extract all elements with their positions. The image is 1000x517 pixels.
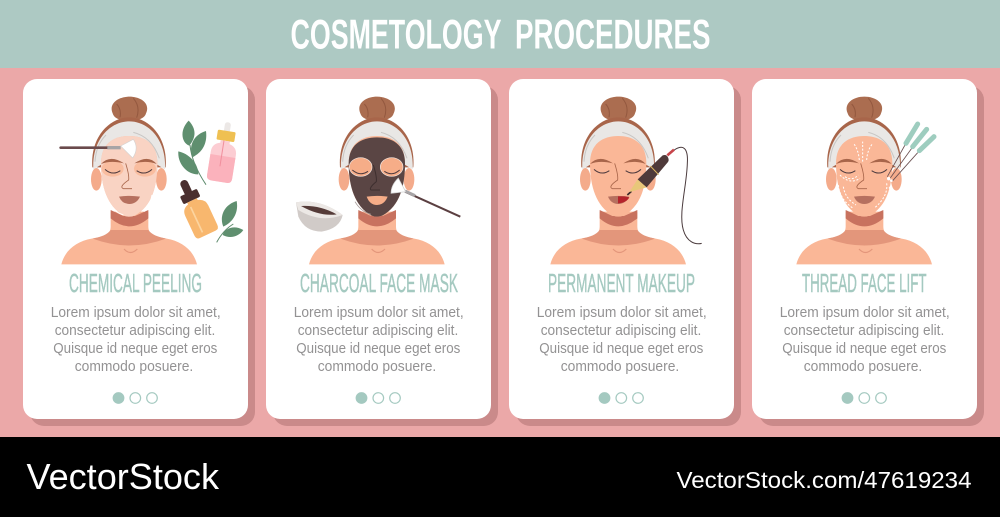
pagination dots bbox=[842, 393, 886, 403]
text block: permanent makeup: Lorem ipsum dolor sit amet, bbox=[537, 305, 707, 321]
heading: charcoal face mask: CHARCOAL FACE MASK bbox=[300, 270, 458, 298]
text block: charcoal face mask: Quisque id neque eget eros bbox=[296, 341, 460, 357]
text block: charcoal face mask: Lorem ipsum dolor sit amet, bbox=[294, 305, 464, 321]
header band bbox=[0, 0, 1000, 68]
pagination dots bbox=[356, 393, 400, 403]
text block: permanent makeup: consectetur adipiscing elit. bbox=[541, 323, 701, 339]
text block: charcoal face mask: commodo posuere. bbox=[318, 359, 436, 375]
text block: thread face lift: Lorem ipsum dolor sit amet, bbox=[780, 305, 950, 321]
text block: permanent makeup: Quisque id neque eget eros bbox=[539, 341, 703, 357]
heading: chemical peeling: CHEMICAL PEELING bbox=[69, 270, 202, 298]
panel: chemical peeling bbox=[23, 79, 255, 426]
illustration: chemical peeling bbox=[61, 97, 243, 264]
text block: chemical peeling bbox=[51, 305, 221, 375]
footer logo: VectorStock bbox=[26, 456, 220, 497]
text block: permanent makeup bbox=[537, 305, 707, 375]
text block: charcoal face mask: consectetur adipiscing elit. bbox=[298, 323, 458, 339]
title: COSMETOLOGY bbox=[290, 10, 502, 58]
text block: chemical peeling: Lorem ipsum dolor sit amet, bbox=[51, 305, 221, 321]
text block: permanent makeup: commodo posuere. bbox=[561, 359, 679, 375]
footer image id: VectorStock.com/47619234 bbox=[676, 467, 972, 493]
pagination dots bbox=[113, 393, 157, 403]
illustration: thread face lift bbox=[796, 97, 934, 264]
text block: chemical peeling: commodo posuere. bbox=[75, 359, 193, 375]
text block: thread face lift: Quisque id neque eget eros bbox=[782, 341, 946, 357]
text block: thread face lift: commodo posuere. bbox=[804, 359, 922, 375]
title: PROCEDURES bbox=[515, 10, 710, 58]
illustration: permanent makeup bbox=[550, 97, 702, 264]
panel: thread face lift bbox=[752, 79, 984, 426]
text block: charcoal face mask bbox=[294, 305, 464, 375]
panel: charcoal face mask bbox=[266, 79, 498, 426]
text block: thread face lift bbox=[780, 305, 950, 375]
heading: permanent makeup: PERMANENT MAKEUP bbox=[548, 270, 695, 298]
footer band bbox=[0, 437, 1000, 517]
text block: thread face lift: consectetur adipiscing elit. bbox=[784, 323, 944, 339]
text block: chemical peeling: consectetur adipiscing elit. bbox=[55, 323, 215, 339]
panel: permanent makeup bbox=[509, 79, 741, 426]
pagination dots bbox=[599, 393, 643, 403]
illustration: charcoal face mask bbox=[296, 97, 460, 264]
text block: chemical peeling: Quisque id neque eget eros bbox=[53, 341, 217, 357]
